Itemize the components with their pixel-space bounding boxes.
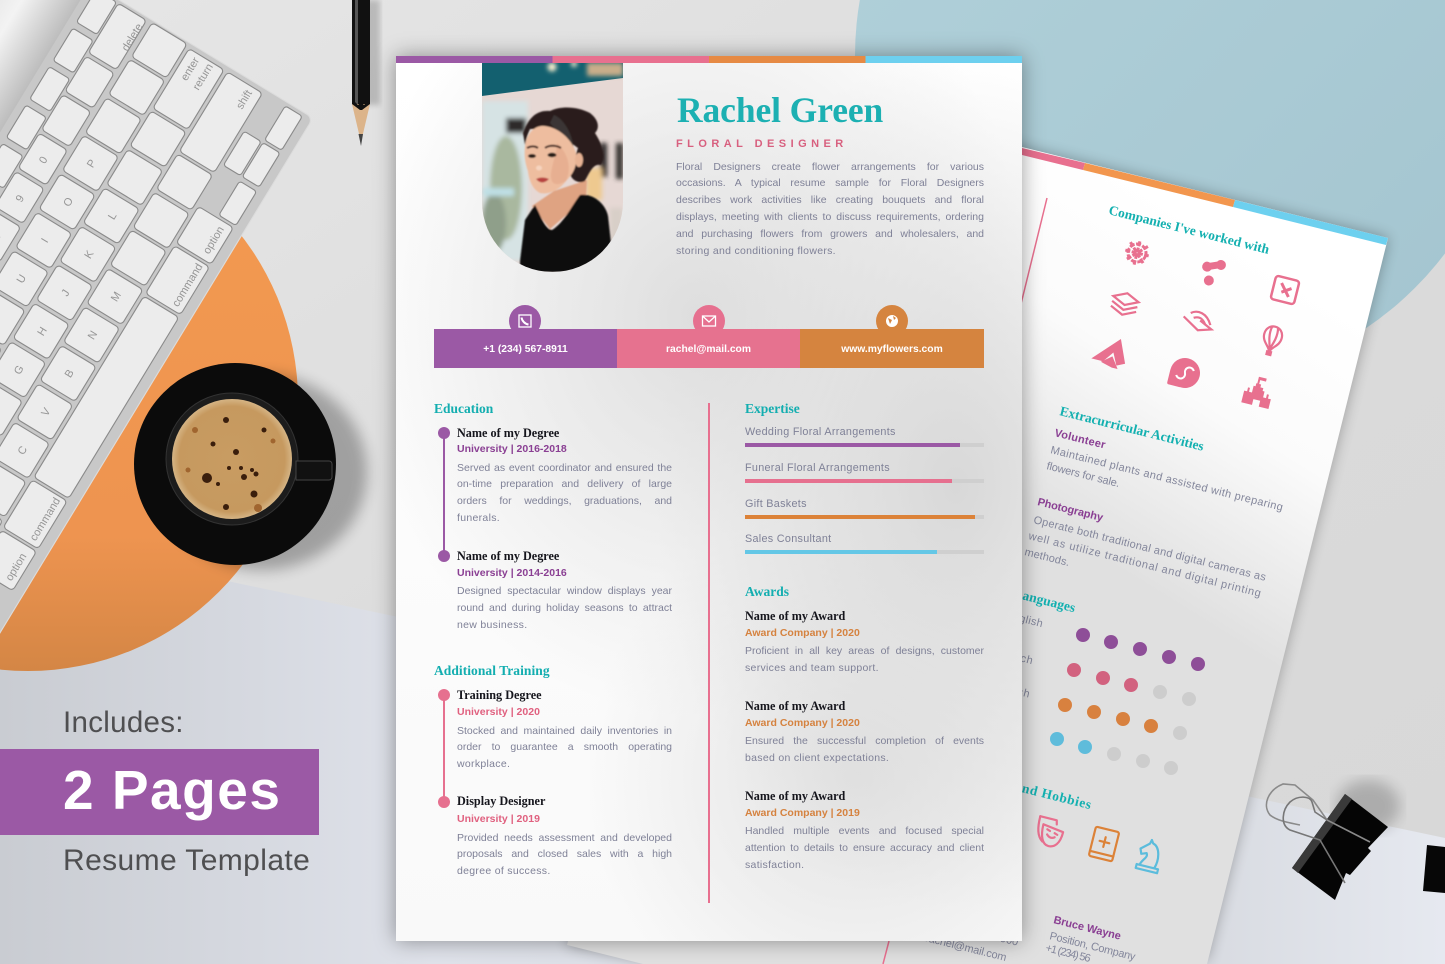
text: includes: Includes: bbox=[63, 706, 184, 739]
keyboard bbox=[0, 0, 344, 887]
extracurricular section: Operate both traditional and digital cameras as bbox=[1032, 514, 1268, 584]
text: resume template: Resume Template bbox=[63, 844, 310, 877]
education entry 2: Designed spectacular window displays year bbox=[457, 585, 672, 597]
panel: includes label bbox=[0, 706, 319, 877]
languages section: French bbox=[994, 646, 1034, 667]
skill: sales consultant: Sales Consultant bbox=[745, 533, 831, 545]
award 3 bbox=[745, 789, 984, 871]
contact: website: www.myflowers.com bbox=[841, 344, 943, 355]
colour stripe bbox=[396, 56, 1022, 63]
skill: wedding floral bbox=[745, 426, 984, 447]
text: summary: describes work activities like creating bouquets and floral bbox=[676, 194, 984, 206]
training entry 1: Training Degree bbox=[457, 688, 542, 702]
keyboard: B bbox=[63, 368, 77, 380]
keyboard: 9 bbox=[14, 193, 27, 205]
contact: website bbox=[800, 329, 984, 368]
text: summary: storing and conditioning flowers. bbox=[676, 245, 836, 257]
education entry 1: orders for weddings, graduations, and bbox=[457, 495, 672, 507]
contact bar bbox=[434, 305, 984, 368]
education entry 2: round and during holiday seasons to attract bbox=[457, 602, 672, 614]
award 3: satisfaction. bbox=[745, 859, 804, 871]
reference contact: Bruce Wayne bbox=[1052, 914, 1122, 943]
company logo icons bbox=[1090, 238, 1300, 409]
pencil bbox=[352, 0, 380, 146]
skill: sales consultant bbox=[745, 533, 984, 554]
skill: funeral floral bbox=[745, 462, 984, 483]
award 2: Award Company | 2020 bbox=[745, 717, 860, 729]
subtitle: role: FLORAL DESIGNER bbox=[676, 138, 848, 150]
education entry 2: University | 2014-2016 bbox=[457, 567, 567, 579]
contact icon: globe bbox=[876, 305, 908, 337]
education entry 1: funerals. bbox=[457, 512, 500, 524]
extracurricular section: well as utilize traditional and digital printing bbox=[1026, 530, 1262, 600]
keyboard: J bbox=[59, 288, 73, 299]
keyboard: G bbox=[12, 363, 27, 377]
keyboard: command bbox=[170, 262, 206, 309]
photo: portrait bbox=[482, 63, 623, 272]
extracurricular section: Extracurricular Activities bbox=[1058, 403, 1206, 454]
reference contact: +1 (234) 567-8900 bbox=[929, 915, 1020, 949]
extracurricular section: Maintained plants and assisted with preparing bbox=[1049, 444, 1284, 514]
languages section bbox=[985, 585, 1205, 775]
languages section: English bbox=[1004, 609, 1044, 630]
keyboard: P bbox=[85, 158, 99, 170]
education entry 1: Served as event coordinator and ensured the bbox=[457, 462, 672, 474]
award 1: Proficient in all key areas of designs, customer bbox=[745, 645, 984, 657]
text: summary: and purchasing flowers from growers and wholesalers, and bbox=[676, 228, 984, 240]
text: summary: Floral Designers create flower arrangements for various bbox=[676, 160, 984, 172]
keyboard: I bbox=[39, 236, 51, 245]
training entry 2: proposals and closed sales with a high bbox=[457, 848, 672, 860]
text: summary: displays, meeting with clients to discuss requirements, ordering bbox=[676, 211, 984, 223]
training entry 2: degree of success. bbox=[457, 865, 551, 877]
keyboard: H bbox=[35, 325, 50, 338]
training entry 1: Stocked and maintained daily inventories in bbox=[457, 724, 672, 736]
award 3: Name of my Award bbox=[745, 789, 845, 803]
award 3: attention to details to ensure accuracy and client bbox=[745, 842, 984, 854]
keyboard: return bbox=[191, 62, 216, 92]
heading: awards: Awards bbox=[745, 584, 789, 599]
keyboard: C bbox=[16, 444, 30, 457]
education entry 1: on-time preparation and delivery of large bbox=[457, 478, 672, 490]
shape: orange circle bbox=[0, 131, 298, 671]
keyboard: M bbox=[109, 290, 124, 304]
banner: 2 pages: 2 Pages bbox=[63, 759, 281, 821]
award 1: services and team support. bbox=[745, 662, 879, 674]
skill: wedding floral: Wedding Floral Arrangements bbox=[745, 426, 896, 438]
heading: companies: Companies I've worked with bbox=[1107, 202, 1271, 257]
skill: gift baskets bbox=[745, 498, 984, 519]
keyboard: delete bbox=[120, 22, 145, 53]
heading: education: Education bbox=[434, 401, 493, 416]
reference contact: rachel@mail.com bbox=[924, 932, 1008, 964]
sheet colour stripe bbox=[1022, 148, 1388, 245]
back sheet of resume bbox=[567, 87, 1388, 964]
training entry 2: University | 2019 bbox=[457, 813, 540, 825]
contact icon: phone bbox=[509, 305, 541, 337]
keyboard: command bbox=[28, 496, 63, 543]
keyboard: U bbox=[15, 273, 29, 286]
keyboard: L bbox=[106, 211, 120, 222]
timeline: training bbox=[438, 689, 450, 808]
reference contact bbox=[924, 914, 1137, 964]
contact: phone: +1 (234) 567-8911 bbox=[483, 344, 568, 355]
extracurricular section: flowers for sale. bbox=[1045, 460, 1121, 490]
education entry 1: University | 2016-2018 bbox=[457, 443, 567, 455]
hobbies section bbox=[956, 764, 1165, 873]
text: summary bbox=[676, 160, 984, 257]
contact: phone bbox=[434, 329, 617, 368]
skill: gift baskets: Gift Baskets bbox=[745, 498, 807, 510]
training entry 1: order to guarantee a smooth operating bbox=[457, 741, 672, 753]
extracurricular section bbox=[1023, 403, 1284, 600]
panel: front resume page bbox=[396, 56, 1022, 941]
coffee cup on saucer bbox=[134, 363, 367, 570]
timeline: education bbox=[438, 427, 450, 562]
heading: additional training: Additional Training bbox=[434, 663, 550, 678]
education entry 1: Name of my Degree bbox=[457, 426, 559, 440]
keyboard: N bbox=[86, 329, 100, 342]
extracurricular section: methods. bbox=[1023, 546, 1071, 569]
text: summary: occasions. A typical resume sample for Floral Designers bbox=[676, 177, 984, 189]
award 2: Name of my Award bbox=[745, 699, 845, 713]
extracurricular section: Volunteer bbox=[1053, 427, 1107, 452]
heading: expertise: Expertise bbox=[745, 401, 800, 416]
training entry 1: University | 2020 bbox=[457, 706, 540, 718]
keyboard: shift bbox=[234, 88, 255, 112]
panel: awards bbox=[745, 584, 984, 871]
award 1: Name of my Award bbox=[745, 609, 845, 623]
reference contact: Position, Company bbox=[1048, 930, 1137, 963]
award 3: Award Company | 2019 bbox=[745, 807, 860, 819]
education entry 2 bbox=[457, 549, 672, 631]
keyboard: V bbox=[39, 405, 54, 419]
education entry 2: Name of my Degree bbox=[457, 549, 559, 563]
language dots bbox=[1050, 628, 1205, 775]
heading: name: Rachel Green bbox=[677, 90, 883, 130]
banner: 2 pages bbox=[0, 749, 319, 835]
award 2: Ensured the successful completion of events bbox=[745, 735, 984, 747]
training entry 1 bbox=[457, 688, 672, 770]
award 1 bbox=[745, 609, 984, 674]
award 3: Handled multiple events and focused special bbox=[745, 825, 984, 837]
keyboard: option bbox=[3, 551, 29, 583]
training entry 2: Display Designer bbox=[457, 794, 545, 808]
shape: blue circle bbox=[855, 0, 1445, 384]
skill: funeral floral: Funeral Floral Arrangements bbox=[745, 462, 890, 474]
contact: email bbox=[617, 329, 800, 368]
panel: expertise bbox=[745, 401, 984, 554]
keyboard: 0 bbox=[37, 155, 51, 166]
contact icon: mail bbox=[693, 305, 725, 337]
languages section: Spanish bbox=[985, 678, 1031, 701]
hobbies section: Interests and Hobbies bbox=[956, 764, 1093, 812]
keyboard: enter bbox=[179, 55, 202, 83]
award 2: based on client expectations. bbox=[745, 752, 889, 764]
binder clips bbox=[1266, 780, 1445, 900]
education entry 1 bbox=[457, 426, 672, 524]
column divider bbox=[708, 403, 710, 903]
panel: additional training bbox=[434, 663, 672, 877]
award 1: Award Company | 2020 bbox=[745, 627, 860, 639]
training entry 1: workplace. bbox=[457, 758, 510, 770]
shape: lower paper bbox=[0, 533, 1445, 964]
contact: email: rachel@mail.com bbox=[666, 344, 751, 355]
panel: education bbox=[434, 401, 672, 631]
training entry 2 bbox=[457, 794, 672, 877]
keyboard: O bbox=[61, 195, 76, 209]
keyboard: K bbox=[82, 248, 97, 261]
education entry 2: new business. bbox=[457, 619, 527, 631]
languages section: Languages bbox=[1012, 585, 1077, 615]
training entry 2: Provided needs assessment and developed bbox=[457, 832, 672, 844]
award 2 bbox=[745, 699, 984, 764]
extracurricular section: Photography bbox=[1036, 496, 1105, 524]
keyboard: option bbox=[201, 224, 227, 256]
